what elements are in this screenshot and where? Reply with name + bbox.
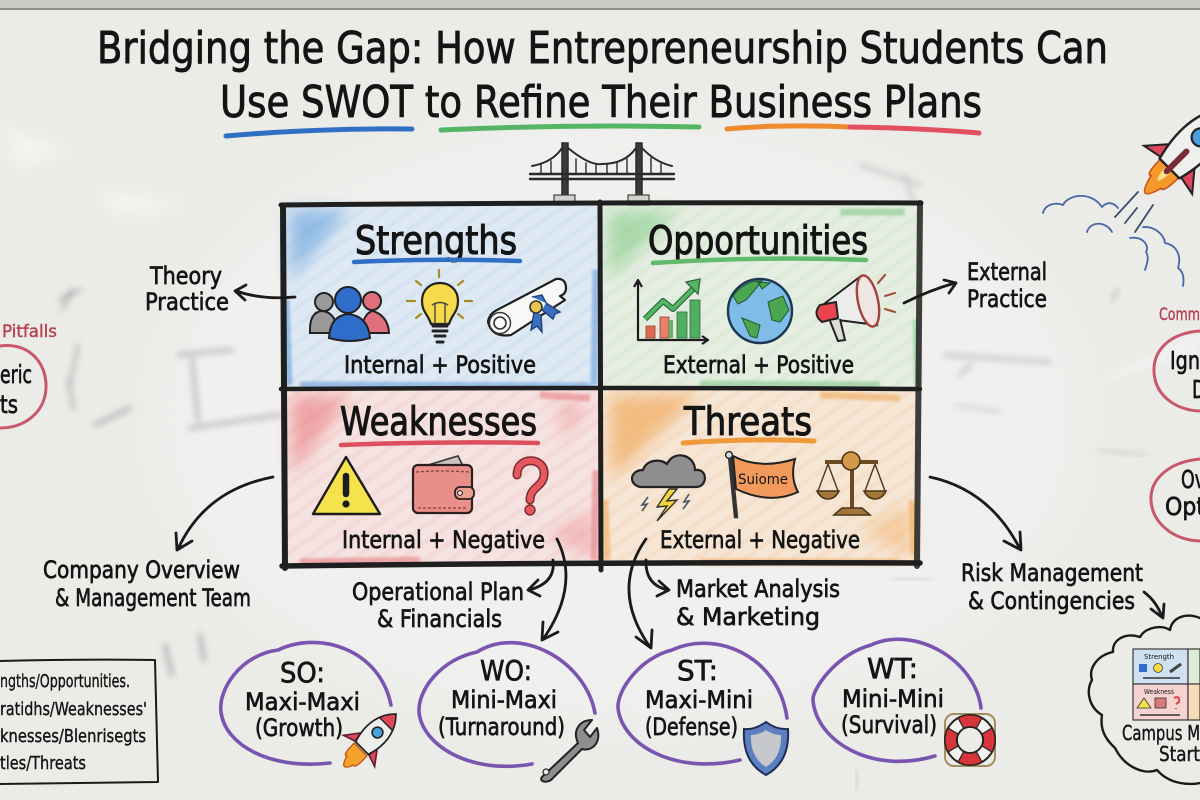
arrow: opportunities to external practice [904, 280, 956, 303]
callout: common pitfalls left: Pitfalls [2, 322, 57, 342]
title [97, 23, 1108, 136]
title: Use SWOT to Refine Their Business Plans [220, 77, 982, 128]
mistake ellipse one [1154, 331, 1200, 411]
label: Risk Management and Contingencies: Risk Management [961, 559, 1143, 587]
arrow: weaknesses to WO strategy [542, 539, 566, 640]
label: Risk Management and Contingencies [961, 559, 1143, 615]
icon: storm cloud [632, 455, 705, 521]
icon: people [310, 287, 389, 341]
smoke clouds [1043, 192, 1183, 286]
heading underline [341, 442, 538, 445]
heading: Threats: Threats [683, 400, 812, 445]
panel: weaknesses [284, 390, 600, 566]
icon: life ring [945, 714, 995, 766]
caption: Internal + Positive: Internal + Positive [344, 351, 536, 379]
caption: External + Negative: External + Negative [660, 526, 860, 554]
label: Theory Practice [145, 262, 229, 316]
arrow: threats to ST strategy [629, 539, 652, 648]
heading: Strengths: Strengths [355, 219, 517, 264]
label: Market Analysis and Marketing: & Marketing [676, 603, 820, 631]
strategy: ST: (Defense) [645, 713, 738, 741]
panel: strategy list box: ngths/Opportunities. [0, 671, 130, 692]
icon: question mark [517, 461, 544, 515]
strategy: WO: (Turnaround) [438, 713, 565, 741]
flag label: Suiome [738, 472, 788, 488]
heading: Opportunities: Opportunities [648, 219, 868, 264]
strategy: ST: ST: [677, 654, 718, 687]
label: Market Analysis and Marketing [676, 575, 840, 631]
strategy: WT [813, 639, 995, 766]
arrow: threats to market analysis [646, 560, 669, 596]
arrow: weaknesses to company overview [176, 477, 273, 550]
mistake ellipse two [1151, 459, 1200, 541]
label: Operational Plan and Financials: Operational Plan [352, 578, 524, 606]
strategy: WT: WT: [867, 652, 918, 685]
strategy: WO: Mini-Maxi [451, 686, 557, 714]
arrow: risk management to campus cloud [1144, 592, 1164, 618]
label: Operational Plan and Financials: & Financials [377, 605, 502, 633]
icon: shield [744, 722, 788, 775]
callout: common pitfalls left [0, 322, 57, 428]
label: Company Overview and Management Team: & Management Team [55, 584, 251, 612]
panel: strategy list box: ratidhs/Weaknesses' [0, 699, 147, 720]
label: Market Analysis and Marketing: Market Analysis [676, 575, 840, 603]
callout: campus cloud [1089, 616, 1200, 784]
icon: globe [728, 279, 792, 343]
icon: flag [726, 452, 798, 517]
label: Company Overview and Management Team [43, 556, 251, 612]
caption: Internal + Negative: Internal + Negative [342, 526, 545, 554]
label: Risk Management and Contingencies: & Contingencies [968, 587, 1135, 615]
panel: opportunities [602, 206, 918, 388]
icon: bridge [530, 143, 674, 205]
icon: launching rocket with smoke [1043, 83, 1200, 286]
mini SWOT board: Strength [1144, 653, 1174, 661]
icon: small rocket [328, 699, 411, 782]
label: Operational Plan and Financials [352, 578, 524, 633]
icon: megaphone [816, 273, 895, 341]
SWOT grid frame [281, 202, 921, 570]
strategy: WO: WO: [480, 654, 532, 687]
strategy: WT: Mini-Mini [842, 685, 944, 713]
label: Theory Practice: Theory [149, 262, 222, 290]
strategy: SO: Maxi-Maxi [245, 688, 360, 716]
strategy: ST: Maxi-Mini [645, 686, 753, 714]
callout: common mistakes right [1151, 305, 1200, 541]
strategy: ST [618, 643, 788, 775]
arrow: strengths to theory practice [235, 285, 295, 300]
heading underline [354, 260, 520, 262]
label: Company Overview and Management Team: Company Overview [43, 556, 240, 584]
icon: wallet [413, 456, 474, 513]
strategy: SO: SO: [280, 656, 325, 689]
heading underline [653, 259, 866, 263]
callout: common pitfalls left: eric [0, 360, 32, 389]
icon: warning triangle [313, 457, 380, 514]
panel: strategy list box: tles/Threats [0, 753, 86, 774]
label: External Practice [967, 258, 1047, 313]
strategy: WT: (Survival) [841, 711, 937, 739]
label: External Practice: External [967, 258, 1047, 286]
strategy: WO [419, 643, 598, 782]
strategy: SO: (Growth) [255, 714, 343, 742]
label: Theory Practice: Practice [145, 288, 229, 316]
icon: growth chart [634, 279, 708, 344]
caption: External + Positive: External + Positive [663, 351, 854, 379]
callout: common pitfalls left: ts [0, 390, 18, 419]
heading: Weaknesses: Weaknesses [340, 400, 537, 445]
pitfall ellipse [0, 345, 46, 428]
mini SWOT board: Weakness [1144, 688, 1174, 696]
icon: light bulb [407, 270, 472, 342]
arrow: weaknesses to operational plan [528, 560, 553, 596]
title underlines [226, 126, 979, 136]
panel: strategy list box: knesses/Blenrisegts [0, 726, 146, 747]
mini SWOT board [1133, 649, 1200, 720]
icon: diploma [488, 279, 566, 335]
big rocket [1121, 83, 1200, 217]
icon: wrench [541, 720, 598, 782]
eraser smudges [60, 165, 1145, 790]
panel: strengths [284, 206, 600, 388]
panel: strategy list box [0, 660, 158, 784]
panel: threats [602, 390, 918, 566]
heading underline [683, 440, 814, 443]
strategy: SO [221, 642, 411, 782]
arrow: threats to risk management [930, 477, 1021, 550]
label: External Practice: Practice [967, 285, 1047, 313]
icon: scales of justice [817, 452, 886, 515]
